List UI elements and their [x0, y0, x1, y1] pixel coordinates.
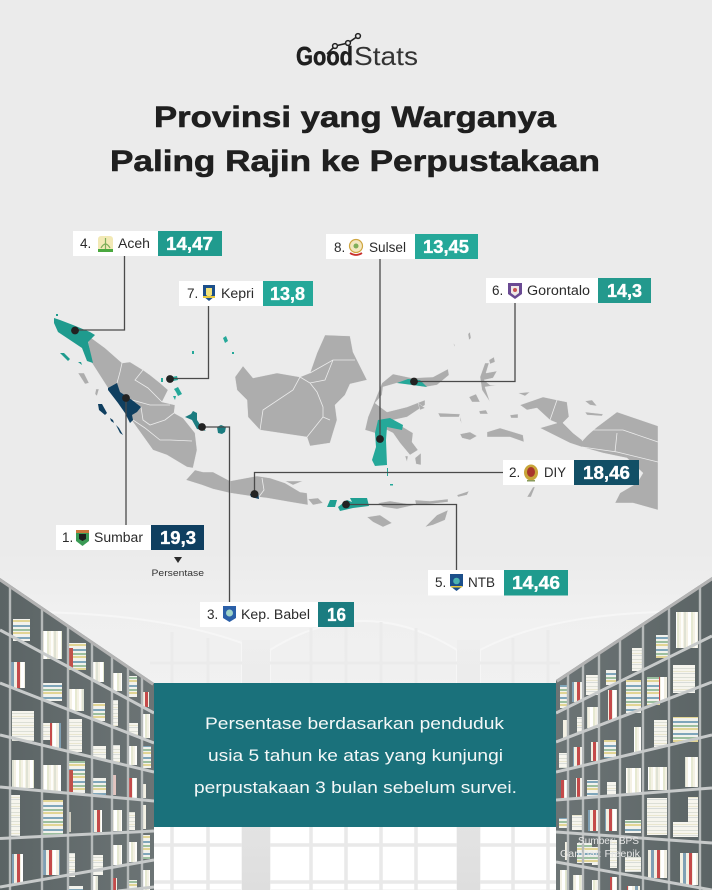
label: 5 NTB: 5.: [435, 575, 446, 590]
title: Provinsi yang Warganya: [154, 101, 556, 134]
label: 2 DIY: 2.: [509, 465, 520, 480]
callout: survey note: Persentase berdasarkan penduduk: [205, 714, 505, 733]
label: 6 Gorontalo: [486, 278, 651, 303]
label: 3 Kep. Babel: 3.: [207, 607, 218, 622]
logo: GoodStats: Stats: [354, 41, 418, 71]
logo: GoodStats: [296, 34, 418, 71]
callout: survey note: [154, 683, 556, 827]
map: Aceh: [54, 314, 95, 365]
label: 7 Kepri: [179, 281, 313, 306]
legend: Persentase: [152, 557, 204, 579]
icon: Kep. Babel crest: [223, 606, 236, 622]
label: 2 DIY: 18,46: [583, 463, 630, 483]
books: right shelf: [559, 612, 698, 890]
map: Sulawesi: [365, 369, 449, 465]
map: Gorontalo: [397, 379, 427, 387]
label: 3 Kep. Babel: 16: [327, 605, 346, 625]
background: library windows: [0, 612, 712, 890]
title: [110, 101, 600, 178]
source credit: [560, 836, 641, 860]
map: Papua: [520, 397, 658, 510]
map: Java: [186, 470, 323, 505]
map: Kalimantan: [235, 335, 367, 446]
label: 4 Aceh: [73, 231, 222, 256]
label: 7 Kepri: Kepri: [221, 286, 254, 301]
callout: survey note: perpustakaan 3 bulan sebelum survei.: [194, 778, 517, 797]
label: 7 Kepri: 13,8: [270, 284, 305, 304]
label: 8 Sulsel: 8.: [334, 240, 345, 255]
books: left shelf: [10, 619, 151, 890]
title: Paling Rajin ke Perpustakaan: [110, 145, 600, 178]
label: 1 Sumbar: Sumbar: [94, 530, 144, 545]
map: Sumatera Barat: [98, 383, 141, 435]
right bookshelf: [556, 577, 712, 890]
label: 4 Aceh: Aceh: [118, 236, 150, 251]
logo: GoodStats: Good: [296, 41, 353, 71]
map: DI Yogyakarta: [250, 492, 259, 499]
icon: NTB crest: [450, 574, 463, 591]
map: Sumatra: [78, 337, 197, 468]
source credit: Sumber: BPS: [578, 836, 639, 847]
label: 1 Sumbar: 1.: [62, 530, 73, 545]
map of Indonesia: [54, 314, 658, 527]
icon: Sumbar crest: [76, 530, 89, 546]
label: 8 Sulsel: Sulsel: [369, 240, 406, 255]
legend: Persentase: Persentase: [152, 568, 204, 579]
icon: Aceh crest: [98, 236, 113, 252]
label: 1 Sumbar: [56, 525, 204, 550]
label: 5 NTB: 14,46: [512, 573, 560, 593]
callout: survey note: usia 5 tahun ke atas yang kunjungi: [208, 746, 503, 765]
map: Kepulauan Riau: [161, 336, 234, 400]
label: 7 Kepri: 7.: [187, 286, 198, 301]
label: 3 Kep. Babel: [200, 602, 354, 627]
label: 5 NTB: [428, 570, 568, 596]
icon: DIY crest: [524, 464, 538, 482]
label: 4 Aceh: 4.: [80, 236, 91, 251]
icon: Kepri crest: [203, 285, 215, 301]
label: 8 Sulsel: 13,45: [423, 237, 469, 257]
label: 8 Sulsel: [326, 234, 478, 259]
label: 2 DIY: DIY: [544, 465, 566, 480]
label: 6 Gorontalo: 6.: [492, 283, 503, 298]
map: Sulawesi Selatan: [372, 418, 403, 486]
label: 1 Sumbar: 19,3: [160, 528, 196, 548]
label: 6 Gorontalo: 14,3: [607, 281, 642, 301]
source credit: Gambar: Freepik: [560, 849, 641, 860]
icon: Gorontalo crest: [508, 283, 522, 299]
left bookshelf: [0, 578, 154, 890]
map: Nusa Tenggara Timur and islands: [367, 487, 535, 527]
label: 4 Aceh: 14,47: [166, 234, 213, 254]
leader lines: [75, 256, 515, 602]
icon: Sulsel crest: [350, 240, 362, 255]
location dots: [71, 327, 418, 508]
label: 5 NTB: NTB: [468, 575, 495, 590]
label: 3 Kep. Babel: Kep. Babel: [241, 607, 310, 622]
map: Maluku: [438, 332, 603, 442]
label: 2 DIY: [503, 460, 639, 485]
map: Bangka Belitung: [185, 411, 226, 434]
label: 6 Gorontalo: Gorontalo: [527, 283, 590, 298]
map: Nusa Tenggara Barat: [327, 498, 369, 511]
